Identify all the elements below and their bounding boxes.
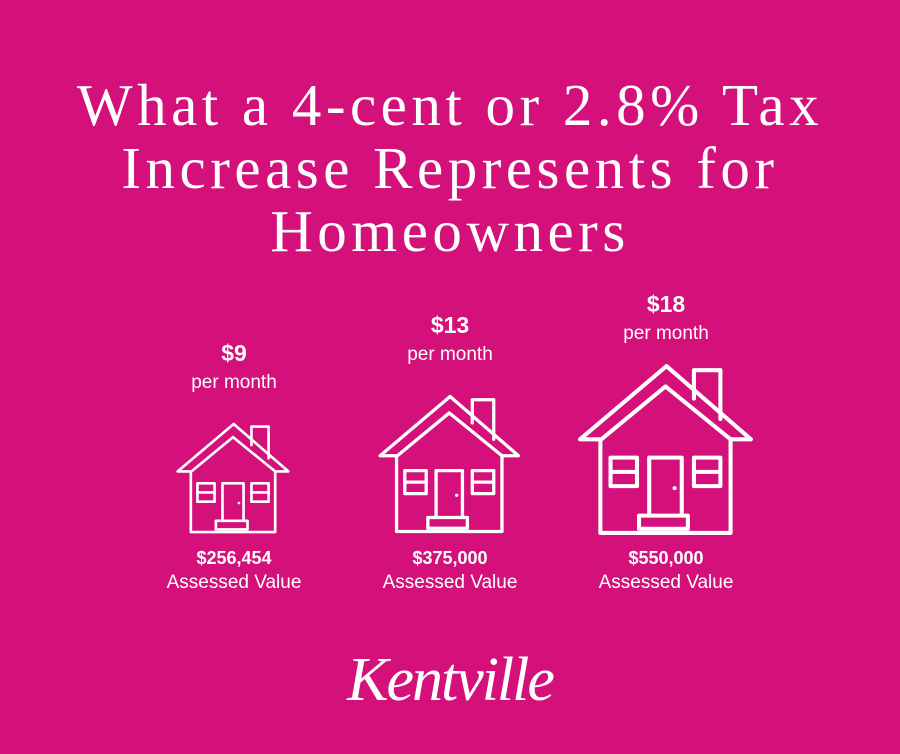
- icon: small house: [176, 422, 290, 534]
- column: large house: [578, 291, 754, 593]
- column: medium house: Assessed Value: [383, 572, 517, 593]
- title: [76, 72, 823, 264]
- column: large house: $18: [647, 291, 685, 317]
- title: What a 4-cent or 2.8% Tax: [77, 72, 823, 138]
- column: medium house: [378, 312, 520, 593]
- title: Homeowners: [270, 198, 630, 264]
- column: medium house: $13: [431, 312, 469, 338]
- column: small house: $256,454: [196, 548, 272, 568]
- icon: medium house: [378, 394, 520, 534]
- icon: large house: [578, 364, 754, 535]
- column: medium house: per month: [407, 344, 493, 365]
- column: small house: per month: [191, 372, 277, 393]
- column: medium house: $375,000: [412, 548, 488, 568]
- logo: Kentville: Kentville: [347, 646, 553, 714]
- column: small house: [166, 340, 301, 593]
- column: large house: per month: [623, 323, 709, 344]
- column: large house: Assessed Value: [599, 572, 733, 593]
- title: Increase Represents for: [121, 135, 779, 201]
- column: large house: $550,000: [628, 548, 704, 568]
- column: small house: $9: [221, 340, 247, 366]
- column: small house: Assessed Value: [167, 572, 301, 593]
